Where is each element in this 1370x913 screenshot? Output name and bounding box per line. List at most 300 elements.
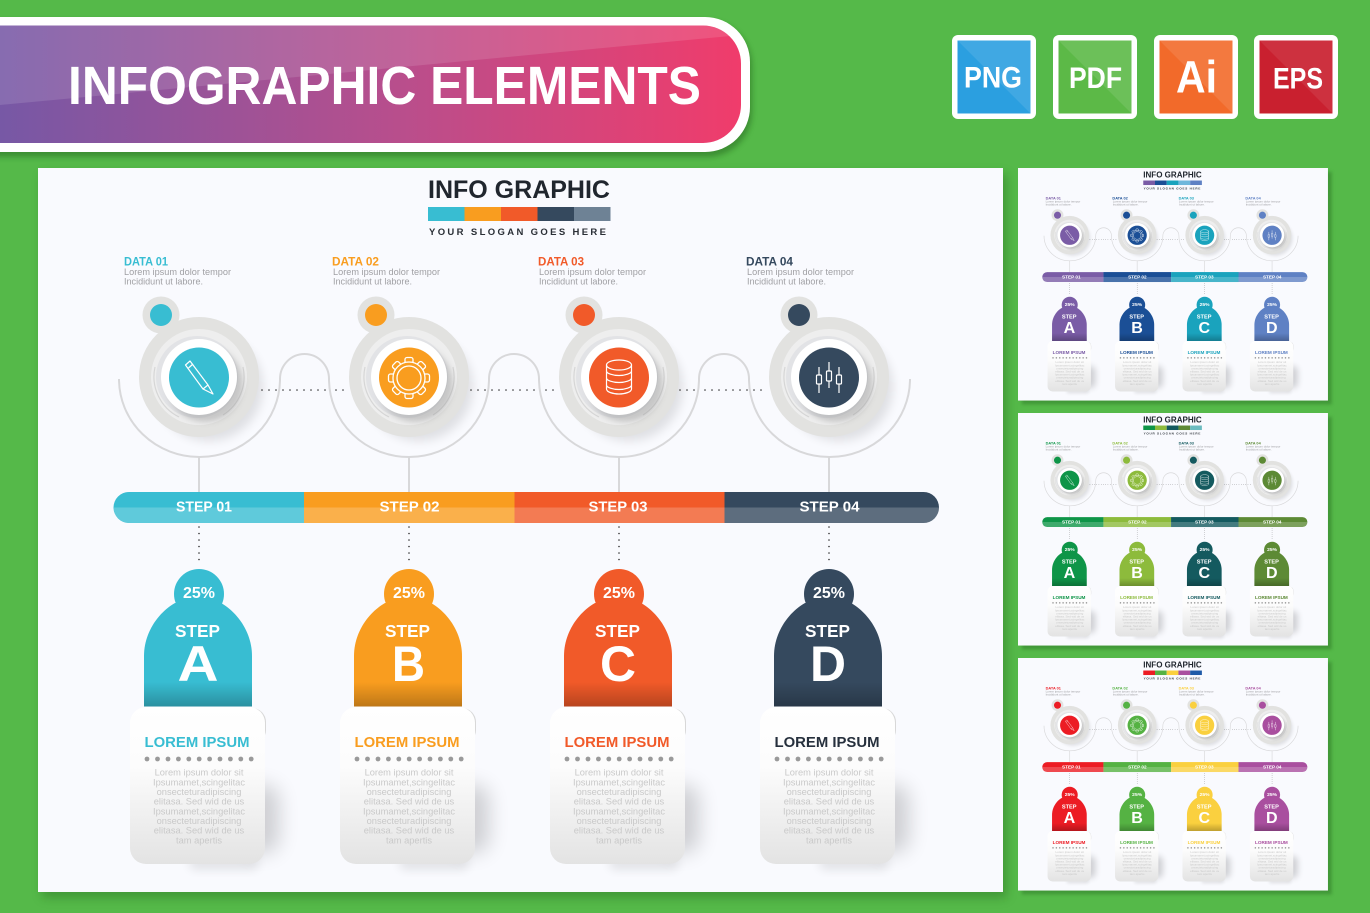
text card B [340,707,489,870]
thumbnail: blue and purple variant: A [1064,319,1076,337]
bell tag B: B [392,636,425,692]
text card C: tam apertis [596,836,642,846]
thumbnail: green variant: tam apertis [1130,627,1145,631]
bell tag A: A [178,636,218,692]
badge: Ai: Ai [1176,52,1217,102]
thumbnail: green variant: onsecteturadipiscing [1191,621,1218,625]
thumbnail: blue and purple variant: C [1198,319,1210,337]
data 04 label: Lorem ipsum dolor tempor [747,267,854,277]
badge: EPS: EPS [1273,62,1323,96]
thumbnail: blue and purple variant: elitasa. Sed wid de us [1123,379,1152,383]
thumbnail: green variant: onsecteturadipiscing [1124,621,1151,625]
text card A: onsecteturadipiscing [157,787,241,797]
thumbnail: blue and purple variant: onsecteturadipiscing [1259,366,1286,370]
thumbnail: green variant: B [1131,564,1143,582]
thumbnail: multicolour variant: elitasa. Sed wid de us [1123,860,1152,864]
thumbnail: blue and purple variant: YOUR SLOGAN GOES HERE [1144,187,1200,191]
thumbnail: multicolour variant: STEP [1062,805,1077,811]
thumbnail: multicolour variant: A [1064,809,1076,827]
thumbnail: blue and purple variant: STEP 04 [1263,274,1282,279]
thumbnail: multicolour variant: Ipsumamet,scingelitac [1122,863,1152,867]
data 04 label [746,254,854,286]
heading: INFO GRAPHIC [428,176,610,204]
thumbnail: multicolour variant: elitasa. Sed wid de us [1258,860,1287,864]
text card C: LOREM IPSUM [564,735,670,751]
thumbnail: blue and purple variant: LOREM IPSUM [1120,350,1153,355]
thumbnail: blue and purple variant: Ipsumamet,scingelitac [1055,373,1085,377]
thumbnail: green variant: Lorem ipsum dolor sit [1123,605,1152,609]
data 02 label: Incididunt ut labore. [333,276,412,286]
thumbnail: blue and purple variant: DATA 01 [1046,196,1062,200]
thumbnail: multicolour variant: Ipsumamet,scingelitac [1055,863,1085,867]
thumbnail: green variant: D [1266,564,1278,582]
connector curve [119,354,910,566]
thumbnail: green variant: Lorem ipsum dolor tempor [1246,444,1280,448]
thumbnail: blue and purple variant: STEP [1197,315,1212,321]
thumbnail: multicolour variant: LOREM IPSUM [1188,840,1220,845]
bell tag B [354,569,462,706]
text card B: elitasa. Sed wid de us [364,797,455,807]
thumbnail: blue and purple variant: INFO GRAPHIC [1143,171,1202,180]
icon: pencil [186,361,213,394]
thumbnail: multicolour variant: Lorem ipsum dolor tempor [1113,689,1147,693]
thumbnail: blue and purple variant: elitasa. Sed wid de us [1055,370,1085,374]
text card A: Ipsumamet,scingelitac [153,806,245,816]
thumbnail: multicolour variant: tam apertis [1197,872,1212,876]
bell tag C: STEP [595,621,640,641]
thumbnail: green variant: Incididunt ut labore. [1113,447,1139,451]
thumbnail: green variant: Lorem ipsum dolor tempor [1179,444,1214,448]
thumbnail: green variant: onsecteturadipiscing [1056,611,1084,615]
thumbnail: blue and purple variant: Ipsumamet,scingelitac [1190,373,1220,377]
text card D: Lorem ipsum dolor sit [785,768,874,778]
icon disc [559,317,683,441]
thumbnail: green variant: Lorem ipsum dolor tempor [1046,444,1080,448]
thumbnail: green variant: LOREM IPSUM [1053,595,1086,600]
thumbnail: multicolour variant: STEP [1264,805,1279,811]
header banner [0,17,752,157]
thumbnail: blue and purple variant: Lorem ipsum dolor sit [1123,360,1152,364]
icon disc [139,317,263,441]
thumbnail: blue and purple variant: 25% [1132,302,1143,308]
thumbnail: multicolour variant: Lorem ipsum dolor sit [1056,850,1084,854]
thumbnail: blue and purple variant: elitasa. Sed wid de us [1190,370,1220,374]
thumbnail: green variant: Lorem ipsum dolor sit [1190,605,1219,609]
text card A: tam apertis [176,836,222,846]
icon disc [349,317,473,441]
data 01 label [124,254,231,286]
thumbnail: green variant: elitasa. Sed wid de us [1123,615,1152,619]
thumbnail: green variant: elitasa. Sed wid de us [1055,624,1085,628]
thumbnail: multicolour variant: INFO GRAPHIC [1143,661,1202,670]
thumbnail: blue and purple variant: LOREM IPSUM [1053,350,1086,355]
thumbnail: multicolour variant: 25% [1200,792,1210,798]
thumbnail: blue and purple variant: Ipsumamet,scingelitac [1055,363,1085,367]
text card B: onsecteturadipiscing [367,816,451,826]
thumbnail: green variant: Incididunt ut labore. [1179,447,1205,451]
thumbnail: blue and purple variant: Ipsumamet,scingelitac [1122,373,1152,377]
thumbnail: multicolour variant: STEP [1129,805,1144,811]
thumbnail: green variant: Lorem ipsum dolor sit [1258,605,1286,609]
thumbnail: multicolour variant: DATA 04 [1245,686,1262,690]
text card A: elitasa. Sed wid de us [154,826,245,836]
thumbnail: green variant: DATA 03 [1179,441,1194,445]
badge: PDF [1053,35,1137,119]
text card C: onsecteturadipiscing [577,787,661,797]
icon disc [769,317,893,441]
thumbnail: multicolour variant: C [1198,809,1210,827]
thumbnail: green variant: A [1064,564,1076,582]
thumbnail: multicolour variant: 25% [1267,792,1278,798]
data 01 label: Lorem ipsum dolor tempor [124,267,231,277]
thumbnail: blue and purple variant: onsecteturadipiscing [1124,376,1151,380]
thumbnail: blue and purple variant: elitasa. Sed wid de us [1258,379,1287,383]
thumbnail: blue and purple variant: 25% [1065,302,1075,308]
thumbnail: green variant: INFO GRAPHIC [1143,416,1202,425]
thumbnail: green variant: YOUR SLOGAN GOES HERE [1144,432,1200,436]
thumbnail: blue and purple variant: onsecteturadipiscing [1056,366,1084,370]
thumbnail: blue and purple variant: STEP [1129,315,1144,321]
thumbnail: multicolour variant: 25% [1132,792,1143,798]
thumbnail: blue and purple variant: tam apertis [1062,382,1078,386]
thumbnail: green variant: STEP 04 [1263,519,1282,524]
thumbnail: multicolour variant: STEP 03 [1195,764,1214,769]
thumbnail: multicolour variant: onsecteturadipiscing [1259,856,1286,860]
thumbnail: blue and purple variant: LOREM IPSUM [1255,350,1288,355]
column D [746,254,909,870]
text card C [550,707,699,870]
thumbnail: green variant: Ipsumamet,scingelitac [1190,608,1220,612]
thumbnail: multicolour variant: LOREM IPSUM [1053,840,1086,845]
data 04 label: DATA 04 [746,254,793,268]
thumbnail: multicolour variant: onsecteturadipiscing [1191,856,1218,860]
text card B: onsecteturadipiscing [367,787,451,797]
text card C: elitasa. Sed wid de us [574,797,665,807]
text card C: Lorem ipsum dolor sit [575,768,664,778]
thumbnail: blue and purple variant: D [1266,319,1278,337]
step bar: STEP 04 [800,500,860,516]
text card C: onsecteturadipiscing [577,816,661,826]
thumbnail: multicolour variant: onsecteturadipiscing [1056,866,1084,870]
text card A: onsecteturadipiscing [157,816,241,826]
thumbnail: multicolour variant: LOREM IPSUM [1255,840,1288,845]
slogan: YOUR SLOGAN GOES HERE [429,227,606,238]
thumbnail: blue and purple variant: STEP [1264,315,1279,321]
thumbnail: blue and purple variant: Incididunt ut labore. [1179,202,1205,206]
thumbnail: multicolour variant: Ipsumamet,scingelitac [1257,863,1287,867]
thumbnail: multicolour variant: elitasa. Sed wid de us [1123,869,1152,873]
thumbnail: blue and purple variant: Incididunt ut labore. [1246,202,1272,206]
step bar: STEP 01 [176,500,232,516]
bell tag C [564,569,672,706]
bell tag D: STEP [805,621,850,641]
bell tag D: D [810,636,846,692]
thumbnail: blue and purple variant: Lorem ipsum dolor sit [1258,360,1286,364]
thumbnail: green variant: STEP [1264,560,1279,566]
thumbnail: multicolour variant: Lorem ipsum dolor tempor [1246,689,1280,693]
step bar: STEP 03 [588,500,648,516]
text card D: elitasa. Sed wid de us [784,797,875,807]
thumbnail: blue and purple variant: onsecteturadipiscing [1056,376,1084,380]
thumbnail: blue and purple variant: STEP 01 [1062,274,1081,279]
thumbnail: blue and purple variant: elitasa. Sed wid de us [1123,370,1152,374]
thumbnail: multicolour variant: tam apertis [1130,872,1145,876]
thumbnail: green variant: elitasa. Sed wid de us [1190,615,1220,619]
text card A [130,707,279,870]
bell tag B: 25% [393,585,425,602]
text card A: Lorem ipsum dolor sit [155,768,244,778]
data 03 label: DATA 03 [538,254,584,268]
marker dot [142,296,180,334]
thumbnail: green variant: Incididunt ut labore. [1046,447,1072,451]
bell tag C: 25% [603,585,635,602]
thumbnail: multicolour variant: STEP 02 [1128,764,1147,769]
main panel [38,168,1007,898]
thumbnail: green variant: onsecteturadipiscing [1124,611,1151,615]
thumbnail: multicolour variant: Lorem ipsum dolor tempor [1179,689,1214,693]
thumbnail: multicolour variant: D [1266,809,1278,827]
thumbnail: multicolour variant: Incididunt ut labore. [1113,692,1139,696]
thumbnail: multicolour variant: Incididunt ut labore. [1046,692,1072,696]
thumbnail: green variant: elitasa. Sed wid de us [1123,624,1152,628]
thumbnail: blue and purple variant: Lorem ipsum dolor tempor [1046,199,1080,203]
thumbnail: green variant: DATA 02 [1112,441,1128,445]
text card B: Ipsumamet,scingelitac [363,806,455,816]
text card D: onsecteturadipiscing [787,816,871,826]
text card D: Ipsumamet,scingelitac [783,806,875,816]
thumbnail: green variant: Incididunt ut labore. [1246,447,1272,451]
thumbnail: green variant: LOREM IPSUM [1255,595,1288,600]
thumbnail: green variant: onsecteturadipiscing [1191,611,1218,615]
thumbnail: multicolour variant: onsecteturadipiscing [1259,866,1286,870]
step bar [113,492,939,523]
thumbnail: green variant: tam apertis [1062,627,1078,631]
marker dot [358,296,394,334]
text card C: elitasa. Sed wid de us [574,826,665,836]
step bar: STEP 02 [380,500,440,516]
thumbnail: green variant: 25% [1132,547,1143,553]
thumbnail: multicolour variant [1018,658,1332,894]
text card B: Lorem ipsum dolor sit [365,768,454,778]
thumbnail: multicolour variant: tam apertis [1062,872,1078,876]
text card A: elitasa. Sed wid de us [154,797,245,807]
thumbnail: green variant: Ipsumamet,scingelitac [1122,608,1152,612]
thumbnail: multicolour variant: onsecteturadipiscing [1191,866,1218,870]
thumbnail: multicolour variant: STEP 01 [1062,764,1081,769]
column C [538,254,699,870]
data 03 label: Lorem ipsum dolor tempor [539,267,646,277]
text card C: Ipsumamet,scingelitac [573,777,665,787]
thumbnail: multicolour variant: elitasa. Sed wid de us [1258,869,1287,873]
data 03 label [538,254,646,286]
thumbnail: green variant: DATA 01 [1046,441,1062,445]
thumbnail: blue and purple variant: elitasa. Sed wid de us [1258,370,1287,374]
thumbnail: green variant: STEP 02 [1128,519,1147,524]
thumbnail: green variant: elitasa. Sed wid de us [1258,624,1287,628]
data 02 label: DATA 02 [332,254,379,268]
data 04 label: Incididunt ut labore. [747,276,826,286]
thumbnail: multicolour variant: STEP [1197,805,1212,811]
marker dot [566,296,602,334]
thumbnail: blue and purple variant: tam apertis [1197,382,1212,386]
thumbnail: blue and purple variant: Ipsumamet,scingelitac [1257,373,1287,377]
colour key bar [428,207,610,221]
thumbnail: blue and purple variant: DATA 02 [1112,196,1128,200]
icon: sliders [816,362,842,393]
thumbnail: green variant: Ipsumamet,scingelitac [1055,608,1085,612]
thumbnail: multicolour variant: STEP 04 [1263,764,1282,769]
thumbnail: blue and purple variant: Lorem ipsum dolor tempor [1113,199,1147,203]
thumbnail: green variant: LOREM IPSUM [1188,595,1220,600]
thumbnail: green variant: elitasa. Sed wid de us [1190,624,1220,628]
text card B: LOREM IPSUM [354,735,460,751]
bell tag B: STEP [385,621,430,641]
thumbnail: green variant: Ipsumamet,scingelitac [1122,618,1152,622]
data 01 label: Incididunt ut labore. [124,276,203,286]
thumbnail: blue and purple variant: Ipsumamet,scingelitac [1190,363,1220,367]
thumbnail: green variant: STEP [1062,560,1077,566]
text card A: LOREM IPSUM [144,735,250,751]
thumbnail: green variant: DATA 04 [1245,441,1262,445]
thumbnail: blue and purple variant: Incididunt ut labore. [1113,202,1139,206]
thumbnail: blue and purple variant: elitasa. Sed wid de us [1055,379,1085,383]
bell tag D [774,569,882,706]
thumbnail: blue and purple variant: Ipsumamet,scingelitac [1257,363,1287,367]
thumbnail: green variant: 25% [1200,547,1210,553]
text card B: elitasa. Sed wid de us [364,826,455,836]
thumbnail: blue and purple variant: onsecteturadipiscing [1191,366,1218,370]
thumbnail: green variant: LOREM IPSUM [1120,595,1153,600]
bell tag C: C [600,636,636,692]
thumbnail: multicolour variant: elitasa. Sed wid de us [1190,860,1220,864]
thumbnail: blue and purple variant: Ipsumamet,scingelitac [1122,363,1152,367]
thumbnail: blue and purple variant: Lorem ipsum dolor tempor [1179,199,1214,203]
bell tag A [144,569,252,706]
thumbnail: multicolour variant: B [1131,809,1143,827]
thumbnail: multicolour variant: tam apertis [1265,872,1280,876]
thumbnail: green variant: STEP 01 [1062,519,1081,524]
text card D: tam apertis [806,836,852,846]
thumbnail: green variant: 25% [1267,547,1278,553]
thumbnail: green variant: onsecteturadipiscing [1056,621,1084,625]
badge: PNG: PNG [964,62,1022,94]
thumbnail: multicolour variant: Lorem ipsum dolor sit [1123,850,1152,854]
thumbnail: green variant: STEP 03 [1195,519,1214,524]
thumbnail: green variant [1018,413,1332,649]
bell tag D: 25% [813,585,845,602]
thumbnail: blue and purple variant: 25% [1200,302,1210,308]
thumbnail: multicolour variant: Lorem ipsum dolor sit [1258,850,1286,854]
thumbnail: blue and purple variant: Lorem ipsum dolor sit [1190,360,1219,364]
thumbnail: green variant: elitasa. Sed wid de us [1055,615,1085,619]
icon: database [606,360,632,394]
thumbnail: green variant: Ipsumamet,scingelitac [1257,618,1287,622]
column A [124,254,279,870]
thumbnail: multicolour variant: Incididunt ut labore. [1179,692,1205,696]
thumbnail: green variant: onsecteturadipiscing [1259,621,1286,625]
bell tag A: 25% [183,585,215,602]
thumbnail: blue and purple variant: onsecteturadipiscing [1191,376,1218,380]
thumbnail: green variant: onsecteturadipiscing [1259,611,1286,615]
thumbnail: multicolour variant: Lorem ipsum dolor sit [1190,850,1219,854]
thumbnail: green variant: 25% [1065,547,1075,553]
text card B: Ipsumamet,scingelitac [363,777,455,787]
thumbnail: green variant: C [1198,564,1210,582]
column B [332,254,489,870]
thumbnail: blue and purple variant: STEP 03 [1195,274,1214,279]
icon: gear [388,358,430,398]
banner title: INFOGRAPHIC ELEMENTS [68,56,701,116]
text card D: Ipsumamet,scingelitac [783,777,875,787]
marker dot [780,296,818,334]
text card D: onsecteturadipiscing [787,787,871,797]
badge: PNG [952,35,1036,119]
thumbnail: green variant: STEP [1129,560,1144,566]
format badges [952,35,1338,119]
thumbnail: blue and purple variant: elitasa. Sed wid de us [1190,379,1220,383]
text card A: Ipsumamet,scingelitac [153,777,245,787]
text card C: Ipsumamet,scingelitac [573,806,665,816]
thumbnail: multicolour variant: YOUR SLOGAN GOES HERE [1144,677,1200,681]
text card D: elitasa. Sed wid de us [784,826,875,836]
thumbnail: green variant: Ipsumamet,scingelitac [1257,608,1287,612]
badge: Ai [1154,35,1238,119]
thumbnail: multicolour variant: Ipsumamet,scingelitac [1190,863,1220,867]
thumbnail: multicolour variant: elitasa. Sed wid de us [1055,860,1085,864]
thumbnail: multicolour variant: DATA 01 [1046,686,1062,690]
text card D: LOREM IPSUM [774,735,880,751]
thumbnail: multicolour variant: Ipsumamet,scingelitac [1190,853,1220,857]
thumbnail: multicolour variant: 25% [1065,792,1075,798]
thumbnail: blue and purple variant: B [1131,319,1143,337]
badge: PDF: PDF [1069,62,1122,95]
thumbnail: green variant: Lorem ipsum dolor sit [1056,605,1084,609]
bell tag A: STEP [175,621,220,641]
thumbnail: multicolour variant: Ipsumamet,scingelitac [1122,853,1152,857]
thumbnail: green variant: STEP [1197,560,1212,566]
thumbnail: blue and purple variant: tam apertis [1130,382,1145,386]
data 01 label: DATA 01 [124,254,168,268]
thumbnail: green variant: Lorem ipsum dolor tempor [1113,444,1147,448]
thumbnail: multicolour variant: Ipsumamet,scingelitac [1257,853,1287,857]
thumbnail: blue and purple variant: Lorem ipsum dolor tempor [1246,199,1280,203]
thumbnail: blue and purple variant [1018,168,1332,404]
thumbnail: blue and purple variant: DATA 04 [1245,196,1262,200]
badge: EPS [1254,35,1338,119]
thumbnail: multicolour variant: Lorem ipsum dolor tempor [1046,689,1080,693]
thumbnail: blue and purple variant: DATA 03 [1179,196,1194,200]
thumbnail: blue and purple variant: Incididunt ut labore. [1046,202,1072,206]
thumbnail: blue and purple variant: onsecteturadipiscing [1259,376,1286,380]
thumbnail: multicolour variant: elitasa. Sed wid de us [1055,869,1085,873]
thumbnail: green variant: Ipsumamet,scingelitac [1055,618,1085,622]
thumbnail: multicolour variant: onsecteturadipiscing [1124,856,1151,860]
thumbnail: blue and purple variant: onsecteturadipiscing [1124,366,1151,370]
data 02 label: Lorem ipsum dolor tempor [333,267,440,277]
thumbnail: blue and purple variant: Lorem ipsum dolor sit [1056,360,1084,364]
thumbnail: green variant: tam apertis [1265,627,1280,631]
thumbnail: blue and purple variant: 25% [1267,302,1278,308]
thumbnail: multicolour variant: Incididunt ut labore. [1246,692,1272,696]
thumbnail: blue and purple variant: STEP [1062,315,1077,321]
thumbnail: green variant: Ipsumamet,scingelitac [1190,618,1220,622]
thumbnail: blue and purple variant: LOREM IPSUM [1188,350,1220,355]
thumbnail: green variant: elitasa. Sed wid de us [1258,615,1287,619]
thumbnail: multicolour variant: elitasa. Sed wid de us [1190,869,1220,873]
thumbnail: multicolour variant: DATA 02 [1112,686,1128,690]
data 03 label: Incididunt ut labore. [539,276,618,286]
thumbnail: multicolour variant: LOREM IPSUM [1120,840,1153,845]
